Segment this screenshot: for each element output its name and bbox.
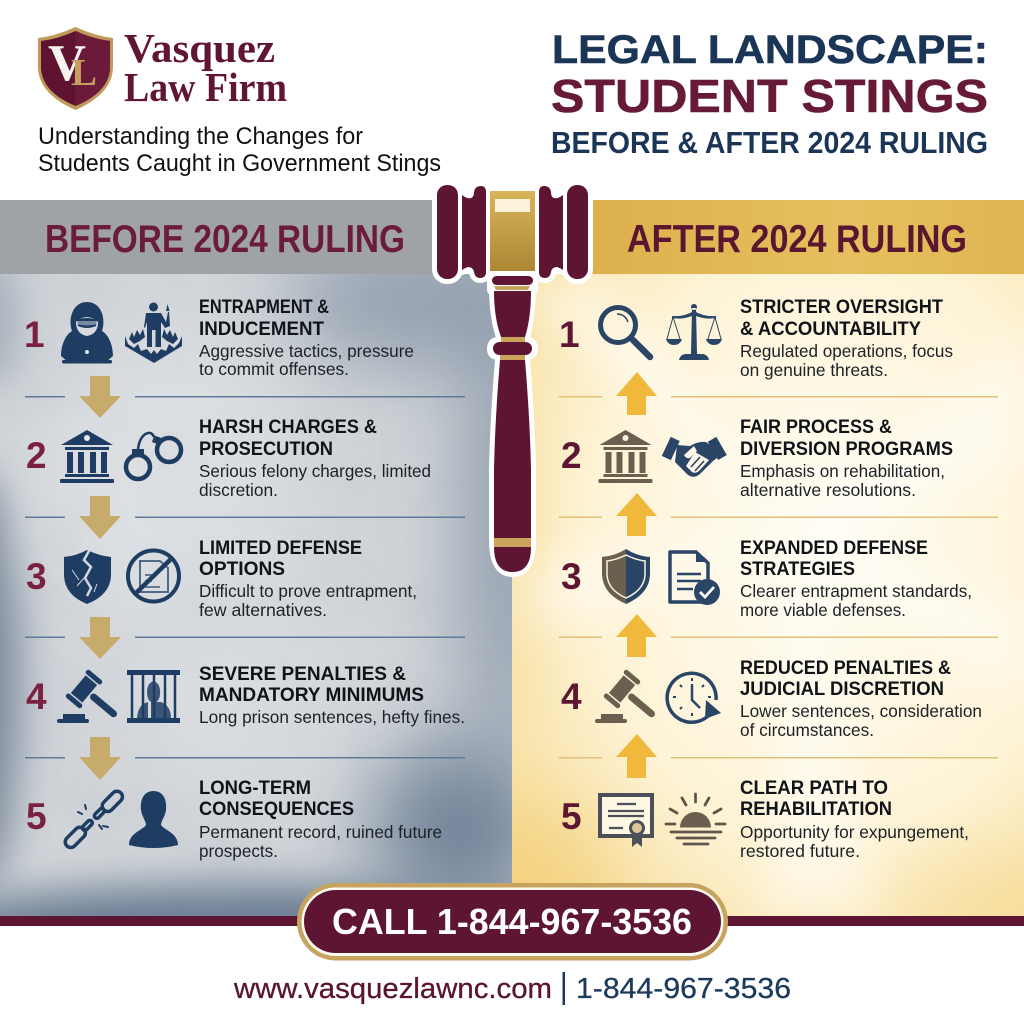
subtitle: Students Caught in Government Stings xyxy=(38,150,441,177)
logo shield: V xyxy=(48,35,86,92)
up arrows xyxy=(616,372,657,778)
text xyxy=(740,416,953,500)
text xyxy=(740,657,982,740)
text: PROSECUTION xyxy=(199,438,333,460)
footer contact xyxy=(233,972,791,1005)
text xyxy=(199,416,431,500)
text: more viable defenses. xyxy=(740,600,906,620)
step 4 after xyxy=(561,657,982,740)
dividers right xyxy=(559,396,998,758)
icon: sunrise xyxy=(666,794,725,844)
icon: scales xyxy=(666,304,722,360)
step 2 after: 2 xyxy=(561,435,582,476)
dividers left xyxy=(25,396,465,758)
icon: clock xyxy=(667,673,721,722)
bottom maroon bar xyxy=(0,916,1024,926)
icon: broken shield xyxy=(64,549,111,604)
gavel xyxy=(437,185,588,572)
icon: person silhouette xyxy=(129,791,178,848)
step 1 before xyxy=(24,296,414,379)
step 1 before: 1 xyxy=(24,314,45,355)
step 2 before: 2 xyxy=(26,435,47,476)
text xyxy=(740,537,972,620)
step 4 after: 4 xyxy=(561,676,582,717)
step 4 before xyxy=(26,663,465,730)
step 5 after xyxy=(561,777,969,861)
firm name: Law Firm xyxy=(124,64,287,110)
text: Opportunity for expungement, xyxy=(740,822,969,842)
step 5 after: 5 xyxy=(561,796,582,837)
step 3 after: 3 xyxy=(561,556,582,597)
text: Regulated operations, focus xyxy=(740,341,953,361)
text xyxy=(740,296,953,380)
text: LONG-TERM xyxy=(199,777,311,799)
call to action button xyxy=(297,883,728,960)
firm name: Vasquez xyxy=(124,25,275,71)
step 1 after: 1 xyxy=(559,314,580,355)
text: CONSEQUENCES xyxy=(199,798,354,820)
header: before 2024 ruling: BEFORE 2024 RULING xyxy=(45,218,405,261)
text: few alternatives. xyxy=(199,600,327,620)
text: on genuine threats. xyxy=(740,360,888,380)
text: STRATEGIES xyxy=(740,558,855,580)
text: Clearer entrapment standards, xyxy=(740,581,972,601)
step 5 before xyxy=(26,777,442,861)
icon: broken chain xyxy=(63,789,125,850)
text: to commit offenses. xyxy=(199,359,349,379)
subtitle: Understanding the Changes for xyxy=(38,123,363,150)
text: REHABILITATION xyxy=(740,798,892,820)
title: LEGAL LANDSCAPE: xyxy=(552,28,988,72)
text: Emphasis on rehabilitation, xyxy=(740,461,945,481)
icon: magnifier xyxy=(600,308,650,357)
icon: courthouse xyxy=(60,430,114,483)
footer contact: www.vasquezlawnc.com xyxy=(233,973,552,1005)
icon: no documents xyxy=(128,550,179,602)
icon: document with check xyxy=(670,550,720,605)
title: BEFORE & AFTER 2024 RULING xyxy=(551,126,988,160)
panel: before background xyxy=(0,230,600,965)
text: CLEAR PATH TO xyxy=(740,777,888,799)
panel: after background xyxy=(440,274,1024,1000)
text: Serious felony charges, limited xyxy=(199,461,431,481)
text: restored future. xyxy=(740,841,860,861)
call to action button: CALL 1-844-967-3536 xyxy=(332,901,692,942)
text xyxy=(199,777,442,861)
icon: gavel xyxy=(595,669,666,730)
text xyxy=(199,663,465,727)
icon: courthouse xyxy=(598,430,652,483)
text: ENTRAPMENT & xyxy=(199,296,329,318)
logo shield xyxy=(38,27,113,110)
text: Permanent record, ruined future xyxy=(199,822,442,842)
text: INDUCEMENT xyxy=(199,318,324,340)
subtitle xyxy=(38,123,441,177)
text: & ACCOUNTABILITY xyxy=(740,318,921,340)
text: of circumstances. xyxy=(740,720,874,740)
icon: handcuffs xyxy=(126,433,181,479)
step 2 before xyxy=(26,416,431,500)
icon: certificate xyxy=(598,793,654,847)
header: after 2024 ruling: AFTER 2024 RULING xyxy=(627,218,967,261)
text: prospects. xyxy=(199,841,278,861)
text xyxy=(199,296,414,379)
title: STUDENT STINGS xyxy=(551,70,988,122)
text: STRICTER OVERSIGHT xyxy=(740,296,943,318)
step 3 after xyxy=(561,537,972,620)
header: after 2024 ruling xyxy=(585,200,1024,274)
step 3 before: 3 xyxy=(26,556,47,597)
text: DIVERSION PROGRAMS xyxy=(740,438,953,460)
footer contact: 1-844-967-3536 xyxy=(576,973,791,1005)
firm name xyxy=(124,25,287,110)
header: before 2024 ruling xyxy=(0,200,440,274)
text: SEVERE PENALTIES & xyxy=(199,663,406,685)
icon: two-tone shield xyxy=(602,549,650,604)
step 1 after xyxy=(559,296,953,380)
down arrows xyxy=(79,376,121,780)
text: REDUCED PENALTIES & xyxy=(740,657,951,679)
text: HARSH CHARGES & xyxy=(199,416,377,438)
text: FAIR PROCESS & xyxy=(740,416,892,438)
text: Difficult to prove entrapment, xyxy=(199,581,417,601)
text xyxy=(199,537,417,620)
text: EXPANDED DEFENSE xyxy=(740,537,928,559)
icon: hooded hacker xyxy=(61,302,113,364)
step 5 before: 5 xyxy=(26,796,47,837)
text xyxy=(740,777,969,861)
text: Lower sentences, consideration xyxy=(740,701,982,721)
text: LIMITED DEFENSE xyxy=(199,537,362,559)
icon: handshake xyxy=(662,437,727,477)
text: discretion. xyxy=(199,480,278,500)
logo shield: L xyxy=(71,52,97,94)
text: JUDICIAL DISCRETION xyxy=(740,678,944,700)
title xyxy=(551,28,988,160)
icon: gavel xyxy=(57,669,128,730)
text: OPTIONS xyxy=(199,558,285,580)
text: Aggressive tactics, pressure xyxy=(199,341,414,361)
icon: jail bars xyxy=(127,670,180,723)
text: alternative resolutions. xyxy=(740,480,916,500)
step 4 before: 4 xyxy=(26,676,47,717)
step 2 after xyxy=(561,416,953,500)
text: MANDATORY MINIMUMS xyxy=(199,684,424,706)
icon: person in trap xyxy=(125,302,182,363)
step 3 before xyxy=(26,537,417,620)
text: Long prison sentences, hefty fines. xyxy=(199,707,465,727)
